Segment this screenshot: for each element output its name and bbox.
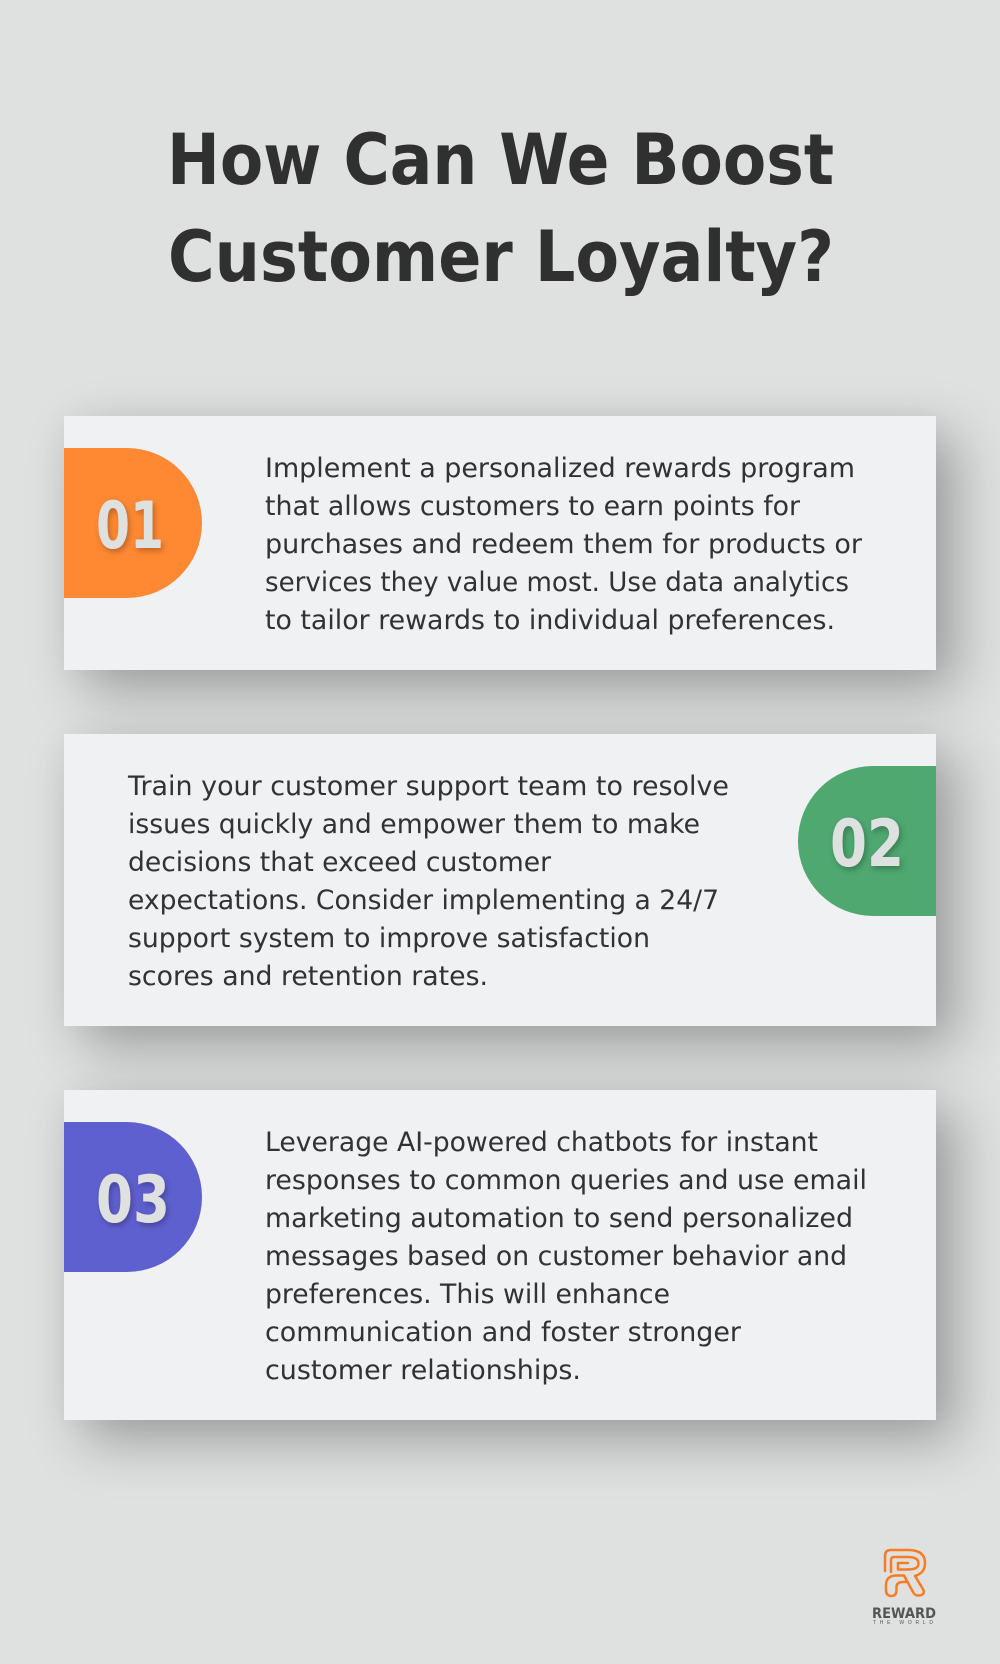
text: step 1 description: services they value most. Use data analytics — [265, 567, 849, 598]
panel: step 1 — [64, 416, 936, 670]
text: step 3 description: preferences. This will enhance — [265, 1279, 670, 1310]
badge: 02: 02 — [830, 807, 904, 882]
logo wordmark: REWARD — [872, 1606, 936, 1622]
text: step 2 description — [127, 771, 729, 992]
text: step 2 description: issues quickly and empower them to make — [128, 809, 700, 840]
text: step 3 description: responses to common queries and use email — [265, 1165, 867, 1196]
text: step 1 description: purchases and redeem them for products or — [265, 529, 863, 560]
text: step 1 description: to tailor rewards to individual preferences. — [265, 605, 835, 636]
text: step 3 description: messages based on customer behavior and — [265, 1241, 847, 1272]
text: step 3 description: Leverage AI-powered chatbots for instant — [265, 1127, 818, 1158]
text: step 3 description: marketing automation to send personalized — [265, 1203, 853, 1234]
text: step 2 description: decisions that exceed customer — [128, 847, 552, 878]
badge: 03 — [64, 1122, 202, 1272]
text: step 1 description: Implement a personalized rewards program — [265, 453, 855, 484]
badge: 01 — [64, 448, 202, 598]
logo wordmark: THE WORLD — [873, 1620, 933, 1626]
title — [167, 119, 834, 298]
text: step 3 description — [265, 1127, 867, 1386]
text: step 2 description: support system to improve satisfaction — [128, 923, 650, 954]
panel: step 2 — [64, 734, 936, 1026]
panel: step 3 — [64, 1090, 936, 1420]
text: step 2 description: expectations. Consider implementing a 24/7 — [128, 885, 719, 916]
badge: 02 — [798, 766, 936, 916]
text: step 3 description: customer relationships. — [265, 1355, 581, 1386]
text: step 3 description: communication and foster stronger — [265, 1317, 742, 1348]
text: step 1 description: that allows customers to earn points for — [265, 491, 801, 522]
title: Customer Loyalty? — [168, 216, 834, 298]
text: step 1 description — [265, 453, 863, 636]
badge: 01: 01 — [96, 489, 164, 564]
text: step 2 description: scores and retention rates. — [128, 961, 488, 992]
icon: orange R mark — [885, 1550, 925, 1596]
title: How Can We Boost — [167, 119, 834, 201]
text: step 2 description: Train your customer support team to resolve — [127, 771, 729, 802]
badge: 03: 03 — [96, 1163, 170, 1238]
